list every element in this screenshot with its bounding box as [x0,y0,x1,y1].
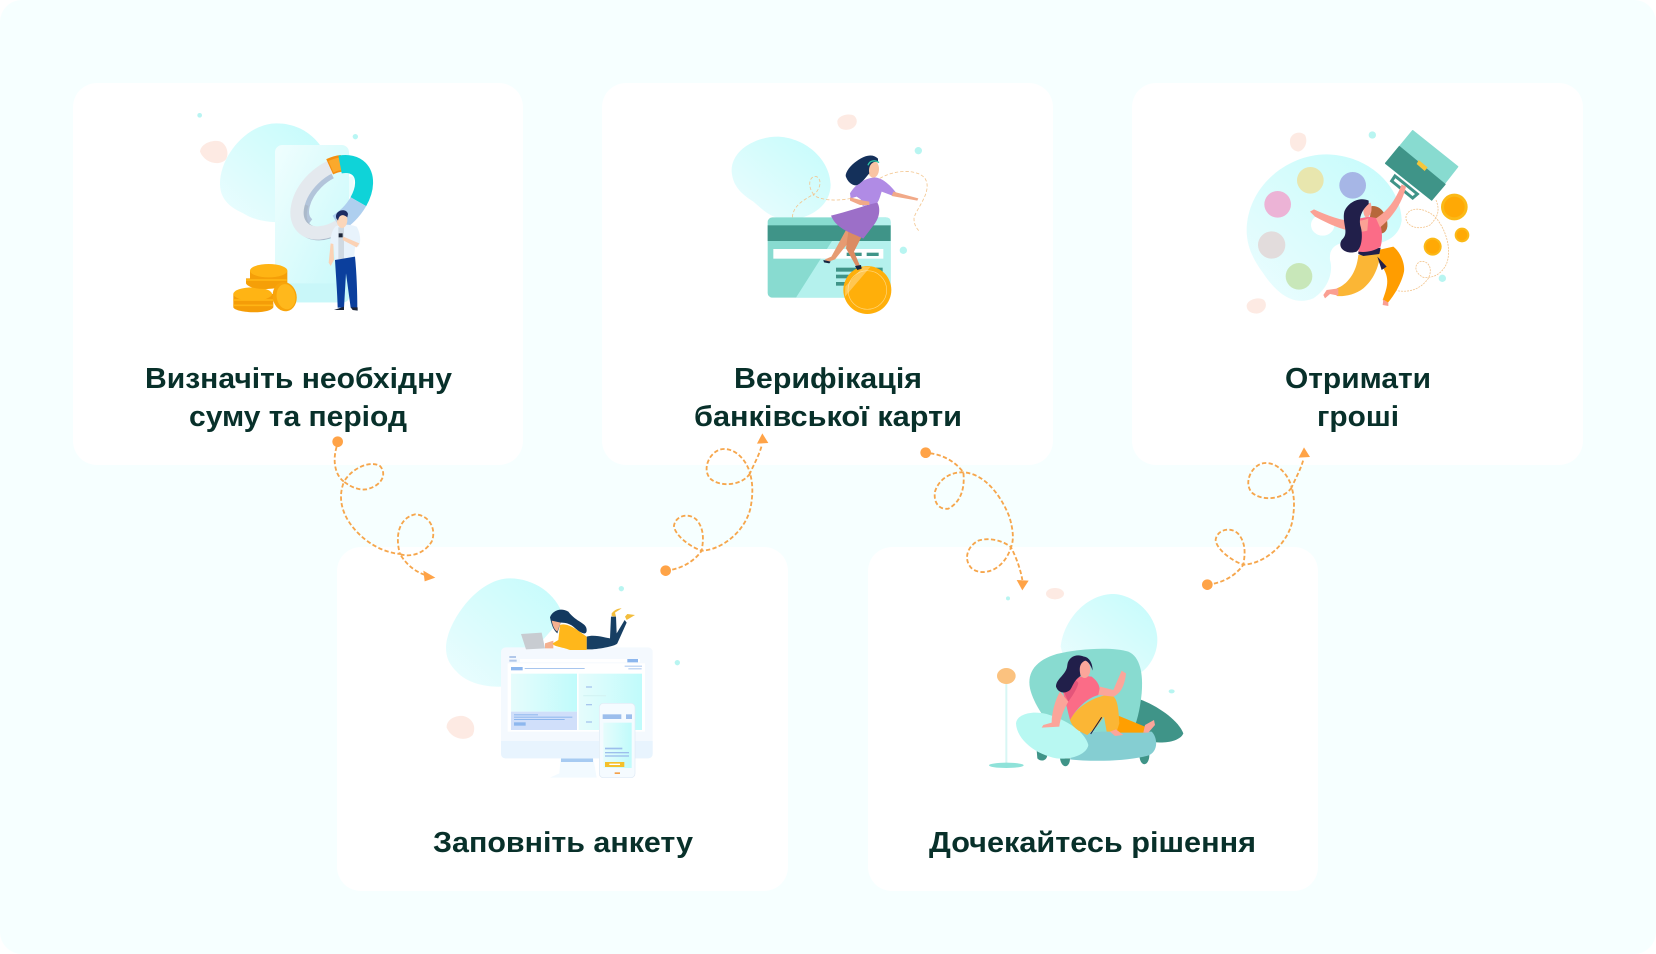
title: step 3 [1285,363,1431,433]
illustration: ring chart, coins and man [197,113,381,313]
title: step 2: Верифікація [734,363,922,395]
panel: step 5 [868,547,1318,891]
card 1 background [73,83,523,465]
title: step 1 [145,363,452,433]
card 5 background [868,547,1318,891]
title: step 5: Дочекайтесь рішення [929,827,1256,859]
panel: step 3 [1132,83,1583,465]
panel: step 4 [337,547,788,891]
panel: step 2 [602,83,1053,465]
title: step 2: банківської карти [694,401,962,433]
illustration: woman resting in armchair [989,588,1183,768]
arrow: step 2 to step 5 [920,447,1029,590]
illustration: bank card, coin and woman [732,115,927,314]
title: step 3: гроші [1317,401,1399,433]
illustration: palette, briefcase and jumping woman [1247,131,1469,314]
title: step 4: Заповніть анкету [433,827,693,859]
card 2 background [602,83,1053,465]
title: step 1: суму та період [189,401,407,433]
title: step 2 [694,363,962,433]
panel: step 1 [73,83,523,465]
title: step 1: Визначіть необхідну [145,363,452,395]
card 3 background [1132,83,1583,465]
card 4 background [337,547,788,891]
arrow: step 1 to step 4 [332,436,435,581]
title: step 3: Отримати [1285,363,1431,395]
arrow: step 4 to step 2 [660,433,768,576]
arrow: step 5 to step 3 [1202,447,1310,590]
illustration: monitor, phone and woman with laptop [446,578,680,778]
